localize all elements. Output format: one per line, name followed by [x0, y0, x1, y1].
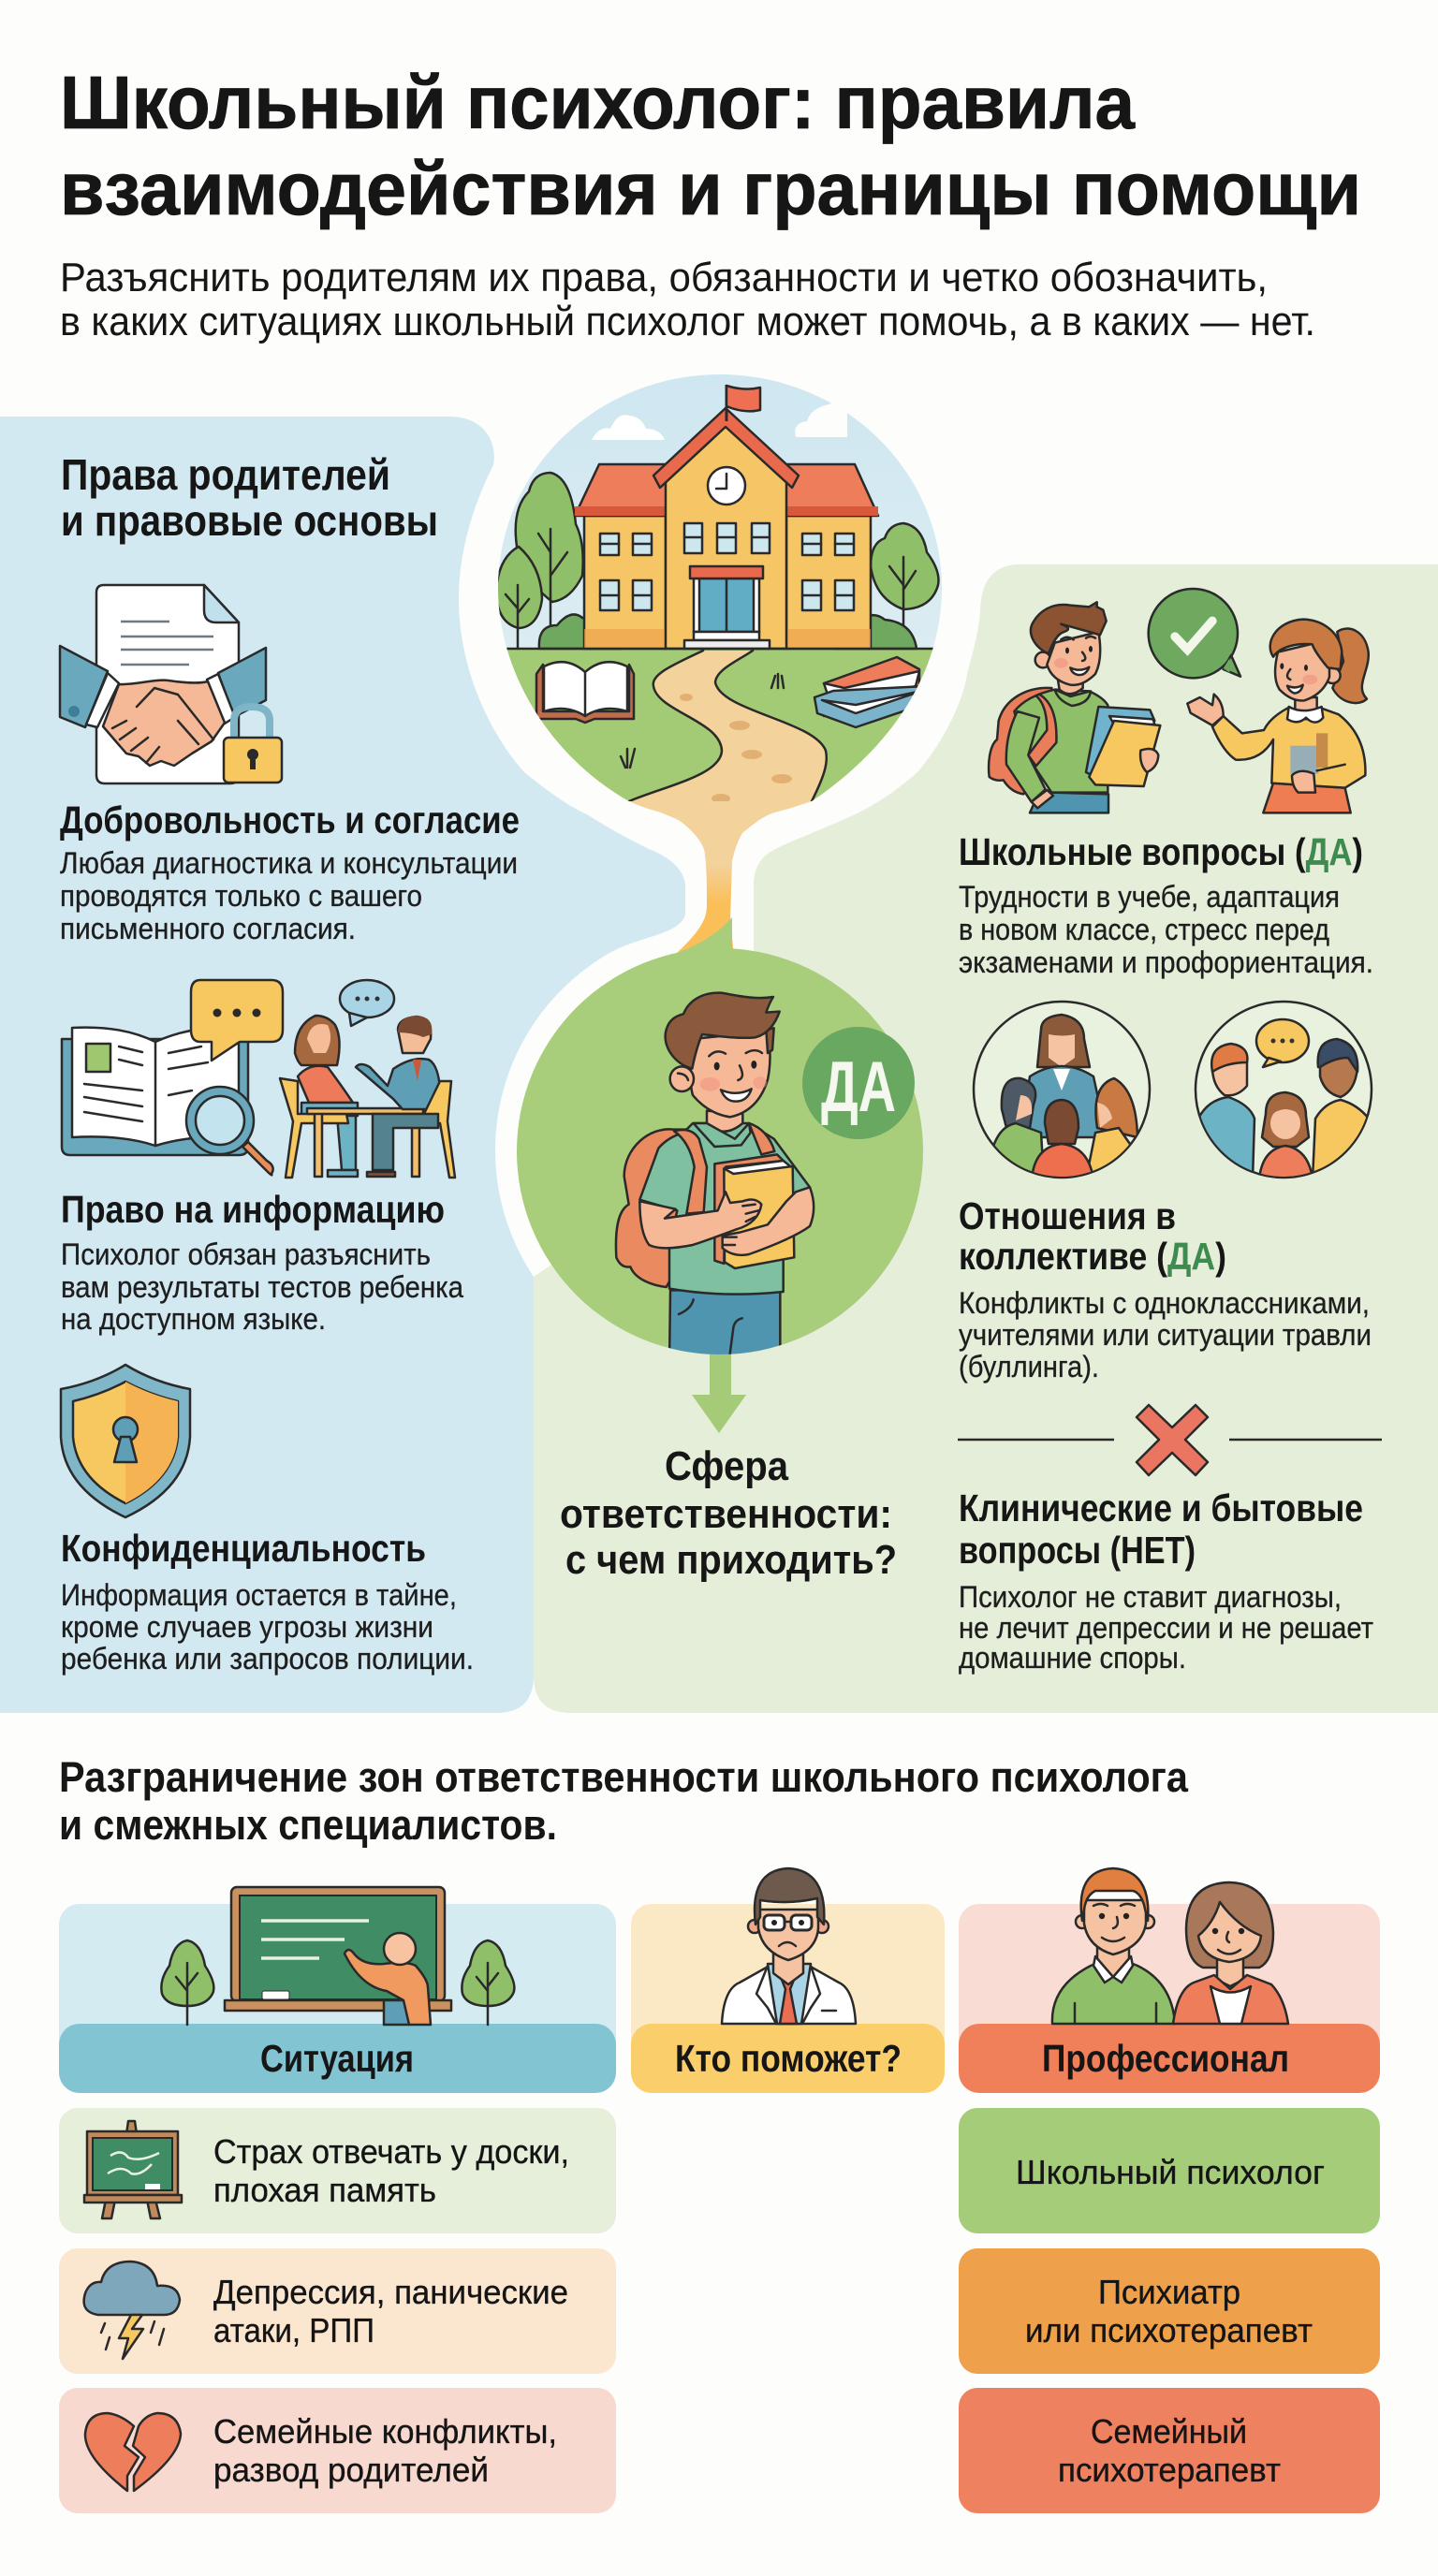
item: relationships in class (yes): (буллинга).: [959, 1350, 1099, 1383]
icon: boy and girl with check mark: [989, 589, 1369, 812]
label: who will help: Кто поможет?: [675, 2037, 902, 2080]
item: school questions (yes): Школьные вопросы (ДА): [959, 830, 1363, 873]
subtitle: Разъяснить родителям их права, обязанности и четко обозначить,: [60, 255, 1268, 300]
item: school questions (yes): Трудности в учебе, адаптация: [959, 880, 1340, 914]
panel: parental rights: [0, 417, 685, 1713]
item: voluntariness and consent: [60, 798, 520, 945]
row 3: professional card: психотерапевт: [1058, 2451, 1281, 2489]
label: professional: Профессионал: [1042, 2037, 1289, 2080]
item: right to information: Психолог обязан разъяснить: [61, 1237, 431, 1271]
text: [213, 2132, 569, 2209]
text: атаки, РПП: [213, 2311, 374, 2349]
item: voluntariness and consent: письменного согласия.: [60, 912, 356, 945]
item: voluntariness and consent: Добровольность и согласие: [60, 798, 520, 842]
icon: storm cloud: [84, 2261, 180, 2359]
item: confidentiality: Информация остается в тайне,: [61, 1578, 457, 1612]
boy figure: [616, 993, 814, 1364]
column header: situation: [59, 1887, 616, 2093]
item: voluntariness and consent: проводятся только с вашего: [60, 879, 422, 913]
icon: couple of family members: [1052, 1868, 1288, 2024]
item: right to information: на доступном языке.: [61, 1302, 326, 1336]
icon: broken heart: [85, 2413, 181, 2491]
item: right to information: [61, 1188, 463, 1336]
arrow: down to scope heading: [692, 1348, 746, 1433]
text: [213, 2412, 557, 2489]
illustration: school building: [496, 374, 946, 814]
row 2: situation card: [59, 2248, 616, 2374]
row 2: professional card: [959, 2248, 1380, 2374]
heading: parental rights: и правовые основы: [61, 496, 438, 545]
title: [60, 61, 1361, 230]
badge: yes: [802, 1027, 915, 1139]
text: Семейные конфликты,: [213, 2412, 557, 2451]
heading: parental rights: Права родителей: [61, 450, 390, 499]
heading: parental rights: [61, 450, 438, 545]
item: relationships in class (yes): учителями или ситуации травли: [959, 1318, 1372, 1352]
item: clinical and domestic questions (no): Психолог не ставит диагнозы,: [959, 1580, 1342, 1614]
icon: shield with keyhole: [61, 1365, 190, 1517]
row 1: professional card: [959, 2108, 1380, 2233]
heading: scope of responsibility: с чем приходить?: [565, 1537, 897, 1583]
heading: boundaries between specialists: Разграничение зон ответственности школьного психолога: [59, 1753, 1189, 1801]
column header: professional: [959, 1868, 1380, 2093]
panel: scope of responsibility: [534, 564, 1438, 1713]
badge: yes: ДА: [821, 1047, 896, 1127]
item: confidentiality: ребенка или запросов полиции.: [61, 1642, 474, 1676]
item: confidentiality: [61, 1527, 474, 1676]
item: school questions (yes): [959, 830, 1373, 979]
row 2: professional card: или психотерапевт: [1025, 2311, 1313, 2349]
item: voluntariness and consent: Любая диагностика и консультации: [60, 846, 518, 880]
item: clinical and domestic questions (no): вопросы (НЕТ): [959, 1529, 1196, 1572]
label: situation: Ситуация: [260, 2037, 414, 2080]
row 2: professional card: Психиатр: [1098, 2273, 1240, 2311]
text: развод родителей: [213, 2451, 489, 2489]
row 3: professional card: [959, 2388, 1380, 2513]
icon: open book with magnifier and conversation: [62, 980, 455, 1178]
item: clinical and domestic questions (no): не лечит депрессии и не решает: [959, 1611, 1373, 1645]
heading: scope of responsibility: ответственности:: [560, 1491, 892, 1537]
heading: scope of responsibility: Сфера: [665, 1443, 788, 1489]
item: relationships in class (yes): Отношения в: [959, 1194, 1176, 1237]
row 1: situation card: [59, 2108, 616, 2233]
item: right to information: Право на информацию: [61, 1188, 445, 1231]
item: school questions (yes): в новом классе, стресс перед: [959, 913, 1329, 946]
divider with cross mark: [958, 1405, 1382, 1475]
text: плохая память: [213, 2171, 436, 2209]
row 1: professional card: Школьный психолог: [1016, 2153, 1325, 2191]
text: Страх отвечать у доски,: [213, 2132, 569, 2171]
icon: group of classmates: [1196, 1002, 1372, 1179]
item: clinical and domestic questions (no): [959, 1486, 1373, 1675]
icon: blackboard and teacher with trees: [161, 1887, 514, 2025]
item: clinical and domestic questions (no): домашние споры.: [959, 1641, 1186, 1675]
title: Школьный психолог: правила: [60, 61, 1135, 144]
icon: doctor: [722, 1868, 856, 2024]
subtitle: [60, 255, 1315, 344]
item: school questions (yes): экзаменами и профориентация.: [959, 945, 1373, 979]
heading: boundaries between specialists: и смежных специалистов.: [59, 1801, 557, 1849]
item: right to information: вам результаты тестов ребенка: [61, 1270, 463, 1304]
column header: who will help: [631, 1868, 945, 2093]
text: [213, 2273, 568, 2349]
icon: easel with chalkboard: [84, 2121, 182, 2218]
item: clinical and domestic questions (no): Клинические и бытовые: [959, 1486, 1363, 1530]
item: relationships in class (yes): Конфликты с одноклассниками,: [959, 1286, 1370, 1320]
illustration: student in circle with yes badge: [517, 917, 923, 1364]
row 3: professional card: Семейный: [1091, 2412, 1247, 2451]
item: confidentiality: кроме случаев угрозы жизни: [61, 1610, 433, 1644]
heading: boundaries between specialists: [59, 1753, 1189, 1849]
row 3: situation card: [59, 2388, 616, 2513]
title: взаимодействия и границы помощи: [60, 147, 1361, 230]
item: relationships in class (yes): [959, 1194, 1372, 1383]
text: Депрессия, панические: [213, 2273, 568, 2311]
icon: teacher with students: [974, 1002, 1150, 1179]
icon: handshake and document with lock: [60, 585, 282, 783]
item: confidentiality: Конфиденциальность: [61, 1527, 426, 1570]
heading: scope of responsibility: [560, 1443, 897, 1583]
connector path between circles: [629, 801, 812, 964]
subtitle: в каких ситуациях школьный психолог может помочь, а в каких — нет.: [60, 299, 1315, 344]
item: relationships in class (yes): коллективе (ДА): [959, 1235, 1226, 1278]
